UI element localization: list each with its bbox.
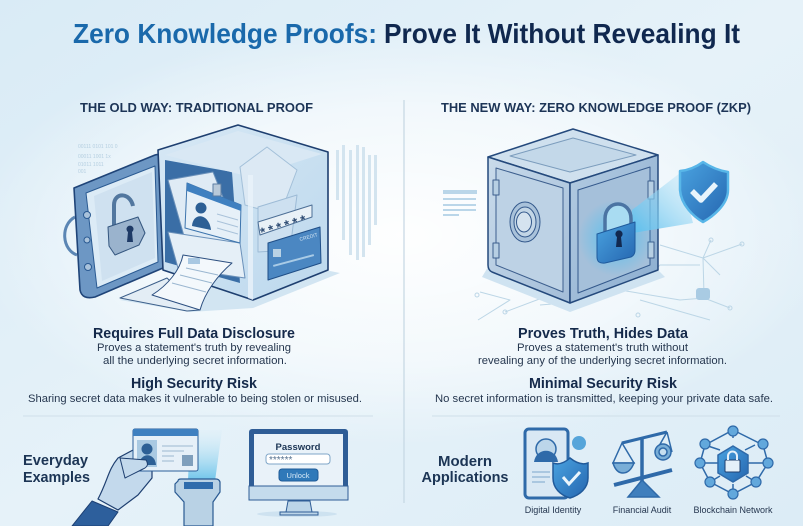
text: high security risk: Sharing secret data makes it vulnerable to being stolen or misused. bbox=[28, 393, 362, 405]
icon: digital identity bbox=[525, 429, 588, 498]
credit card: CREDIT bbox=[299, 232, 319, 243]
id card bbox=[185, 183, 241, 243]
documents inside bbox=[240, 147, 297, 215]
paper receipt bbox=[120, 278, 200, 311]
text: full data disclosure: Requires Full Data Disclosure bbox=[93, 325, 295, 342]
title: Prove It Without Revealing It bbox=[384, 18, 740, 49]
hinges bbox=[493, 180, 654, 258]
text: high security risk: High Security Risk bbox=[131, 375, 258, 392]
text: financial audit: Financial Audit bbox=[613, 505, 672, 515]
safe top bbox=[488, 129, 658, 183]
right column text bbox=[435, 325, 773, 405]
text: full data disclosure: all the underlying secret information. bbox=[103, 355, 287, 367]
illustration: closed safe with ZKP lock bbox=[443, 129, 744, 320]
icon: financial audit scales bbox=[613, 432, 672, 497]
label: modern applications: Applications bbox=[422, 469, 508, 486]
icon: password monitor: Unlock bbox=[287, 471, 310, 480]
label: everyday examples: Examples bbox=[23, 469, 90, 486]
shadow bbox=[120, 265, 340, 312]
binary data left bbox=[78, 144, 118, 175]
heading: the new way: THE NEW WAY: ZERO KNOWLEDGE PROOF (ZKP) bbox=[441, 100, 751, 115]
text lines icon bbox=[443, 190, 477, 216]
text: blockchain network: Blockchain Network bbox=[693, 505, 773, 515]
icon: hand holding id card bbox=[72, 429, 198, 526]
binary data right bbox=[336, 145, 377, 260]
illustration: open glass safe bbox=[65, 125, 377, 312]
heading: the old way: THE OLD WAY: TRADITIONAL PROOF bbox=[80, 100, 313, 115]
shadow bbox=[482, 267, 665, 312]
safe right face bbox=[570, 155, 658, 303]
safe left face bbox=[488, 157, 570, 303]
text: full data disclosure: Proves a statement's truth by revealing bbox=[97, 342, 291, 354]
binary data left: 001 bbox=[78, 169, 87, 175]
text: proves truth: revealing any of the underlying secret information. bbox=[478, 355, 727, 367]
door handle bbox=[65, 217, 77, 255]
label: everyday examples: Everyday bbox=[23, 452, 89, 469]
icon: scanner bbox=[175, 430, 222, 526]
label: everyday examples bbox=[23, 452, 90, 486]
glass box bbox=[158, 125, 328, 300]
title: Zero Knowledge Proofs: bbox=[73, 18, 377, 49]
credit card bbox=[268, 227, 321, 280]
icon: blockchain network bbox=[695, 426, 773, 499]
label: modern applications bbox=[422, 453, 508, 486]
password field: ****** bbox=[258, 212, 309, 240]
binary data left: 00111 0101 101 0 bbox=[78, 144, 118, 150]
binary data left: 00011 1001 1x bbox=[78, 154, 111, 160]
icon: password monitor bbox=[249, 429, 348, 517]
text: full data disclosure bbox=[93, 325, 295, 367]
safe door bbox=[74, 155, 163, 298]
database icon bbox=[696, 288, 710, 300]
text: proves truth bbox=[478, 325, 727, 367]
label: modern applications: Modern bbox=[438, 453, 492, 470]
broken padlock bbox=[108, 195, 145, 255]
network lines bbox=[475, 238, 744, 320]
text: minimal security risk: Minimal Security Risk bbox=[529, 375, 678, 392]
glow bbox=[578, 200, 654, 276]
text: digital identity: Digital Identity bbox=[525, 505, 582, 515]
icon: password monitor: ****** bbox=[269, 455, 292, 466]
icon: password monitor: Password bbox=[276, 442, 321, 453]
text: proves truth: Proves a statement's truth without bbox=[517, 342, 689, 354]
beam bbox=[632, 173, 693, 233]
shield bbox=[680, 162, 728, 222]
text: high security risk bbox=[28, 375, 362, 405]
text: proves truth: Proves Truth, Hides Data bbox=[518, 325, 689, 342]
combination dial bbox=[510, 202, 540, 242]
left column text bbox=[28, 325, 362, 405]
text: minimal security risk bbox=[435, 375, 773, 405]
padlock bbox=[597, 204, 635, 263]
title bbox=[73, 18, 740, 49]
text: minimal security risk: No secret information is transmitted, keeping your private data safe. bbox=[435, 393, 773, 405]
binary data left: 01011 1011 bbox=[78, 162, 104, 168]
